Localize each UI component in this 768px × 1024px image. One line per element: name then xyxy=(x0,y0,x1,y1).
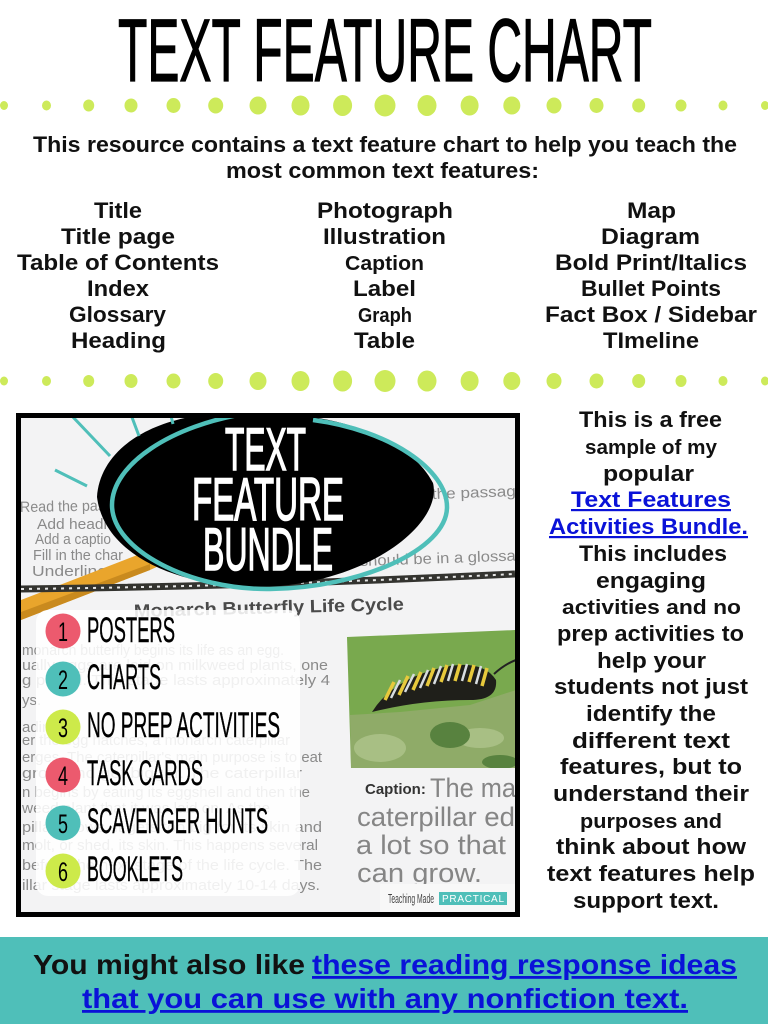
feature list column 2 xyxy=(317,198,453,353)
list of bundle contents: BOOKLETS xyxy=(87,850,183,889)
panel: bundle cover image: the passag xyxy=(432,483,516,503)
sidebar description text: students not just xyxy=(554,674,749,699)
worksheet paragraph: ually eggs are laid on milkweed plants, one xyxy=(22,657,328,674)
teal swoosh xyxy=(112,413,447,589)
footer band: You might also like xyxy=(33,949,305,980)
intro text xyxy=(33,132,737,183)
worksheet paragraph: grow and get bigger. The caterpillar xyxy=(22,765,302,782)
feature list column 2: Label xyxy=(353,276,416,301)
feature list column 3: Map xyxy=(627,198,676,223)
sidebar description text: understand their xyxy=(553,781,749,806)
bundle heading: BUNDLE xyxy=(203,516,333,583)
brand logo: Teaching Made xyxy=(388,891,434,906)
list of bundle contents: 1 xyxy=(58,617,68,647)
intro text: This resource contains a text feature chart to help you teach the xyxy=(33,132,737,157)
brand logo: PRACTICAL xyxy=(442,894,504,905)
panel: bundle cover image xyxy=(16,412,520,917)
feature list column 3: Fact Box / Sidebar xyxy=(545,302,757,327)
sidebar description text: purposes and xyxy=(580,810,722,833)
feature list column 1: Index xyxy=(87,276,150,301)
footer band: these reading response ideas xyxy=(312,949,737,980)
panel: bundle cover image: Underline xyxy=(32,563,107,580)
worksheet paragraph: n begins by eating its eggshell and then the xyxy=(22,784,310,801)
pencil xyxy=(21,556,157,620)
worksheet heading: Monarch Butterfly Life Cycle xyxy=(134,594,404,621)
list of bundle contents xyxy=(46,611,280,889)
sidebar description text: engaging xyxy=(596,568,706,593)
bundle heading xyxy=(194,428,343,572)
footer band xyxy=(0,937,768,1024)
sidebar description text: identify the xyxy=(586,701,716,726)
worksheet paragraph: adin xyxy=(22,719,50,736)
sidebar description text: support text. xyxy=(573,888,719,913)
worksheet paragraph: erges. The caterpillar's main purpose is to eat xyxy=(22,749,323,766)
feature list column 2: Table xyxy=(354,328,415,353)
bundle heading: TEXT xyxy=(225,416,306,483)
list of bundle contents: SCAVENGER HUNTS xyxy=(87,802,268,841)
worksheet paragraph: illar stage lasts approximately 10-14 days. xyxy=(22,877,320,894)
feature list column 3: Bullet Points xyxy=(581,276,721,301)
list of bundle contents: 2 xyxy=(58,665,68,695)
feature list column 3 xyxy=(545,198,757,353)
panel: bundle cover image: Add a captio xyxy=(35,531,111,548)
feature list column 1: Title page xyxy=(61,224,175,249)
worksheet paragraph: pillar grows, it gets too big for its skin and xyxy=(22,819,322,836)
worksheet paragraph xyxy=(21,642,330,894)
handwritten caption: a lot so that xyxy=(356,830,507,860)
worksheet paragraph: weed plant that it was laid on. As the xyxy=(21,800,270,817)
feature list column 3: Diagram xyxy=(601,224,700,249)
handwritten caption: Caption: xyxy=(365,781,426,798)
list of bundle contents: NO PREP ACTIVITIES xyxy=(87,706,280,745)
feature list column 1: Table of Contents xyxy=(17,250,219,275)
worksheet paragraph: before the next stage of the life cycle. The xyxy=(22,857,322,874)
sidebar description text: This includes xyxy=(579,541,727,566)
sidebar description text: different text xyxy=(572,728,731,753)
top dotted divider xyxy=(0,94,768,116)
panel: bundle cover image: should be in a glossa xyxy=(360,548,517,570)
worksheet paragraph: er the egg hatches, a monarch caterpillar xyxy=(22,732,290,749)
sidebar description text: text features help xyxy=(547,861,755,886)
intro text: most common text features: xyxy=(226,158,539,183)
feature list column 2: Photograph xyxy=(317,198,453,223)
list of bundle contents: CHARTS xyxy=(87,658,161,697)
panel: bundle cover image: Add headi xyxy=(37,516,107,533)
feature list column 2: Illustration xyxy=(323,224,446,249)
worksheet paragraph: g period. This stage lasts approximately 4 xyxy=(22,672,330,689)
decorative border band xyxy=(21,574,515,589)
handwritten caption: can grow. xyxy=(357,858,482,888)
list of bundle contents: 6 xyxy=(58,857,68,887)
sidebar description text: Activities Bundle. xyxy=(549,514,748,539)
list of bundle contents: TASK CARDS xyxy=(87,754,203,793)
panel: bundle cover image: Read the pas xyxy=(20,498,105,516)
sidebar description text: think about how xyxy=(556,834,747,859)
sidebar description text: help your xyxy=(597,648,706,673)
feature list column 3: TImeline xyxy=(603,328,699,353)
bundle heading: FEATURE xyxy=(192,466,344,533)
list of bundle contents: POSTERS xyxy=(87,611,175,650)
sidebar description text: popular xyxy=(603,461,694,486)
list of bundle contents: 5 xyxy=(58,809,68,839)
sidebar description text: features, but to xyxy=(560,754,742,779)
handwritten caption xyxy=(356,773,517,888)
handwritten caption: caterpillar ed xyxy=(357,802,515,832)
feature list column 2: Caption xyxy=(345,252,424,275)
sidebar description text: activities and no xyxy=(562,596,741,619)
worksheet paragraph: molt, or shed, its skin. This happens several xyxy=(22,837,318,854)
list of bundle contents: 4 xyxy=(58,761,68,791)
footer band: that you can use with any nonfiction text. xyxy=(82,983,688,1014)
feature list column 2: Graph xyxy=(358,304,412,327)
translucent list panel xyxy=(36,610,300,896)
sidebar description text: Text Features xyxy=(571,487,731,512)
sidebar description text: sample of my xyxy=(585,436,718,459)
feature list column 1: Heading xyxy=(71,328,166,353)
feature list column 3: Bold Print/Italics xyxy=(555,250,747,275)
lower dotted divider xyxy=(0,370,768,392)
worksheet paragraph: ys. xyxy=(22,692,41,709)
sidebar description text xyxy=(547,407,755,913)
caterpillar photo xyxy=(347,630,515,768)
handwritten caption: The ma xyxy=(430,773,517,803)
sidebar description text: prep activities to xyxy=(557,621,744,646)
rays xyxy=(55,412,173,486)
worksheet paragraph: monarch butterfly begins its life as an egg. xyxy=(22,642,284,659)
sidebar description text: This is a free xyxy=(579,407,722,432)
list of bundle contents: 3 xyxy=(58,713,68,743)
brand logo xyxy=(388,884,507,906)
feature list column 1: Glossary xyxy=(69,302,167,327)
feature list column 1: Title xyxy=(94,198,142,223)
panel: bundle cover image: Fill in the char xyxy=(33,547,123,564)
feature list column 1 xyxy=(17,198,219,353)
black blob xyxy=(97,412,434,587)
